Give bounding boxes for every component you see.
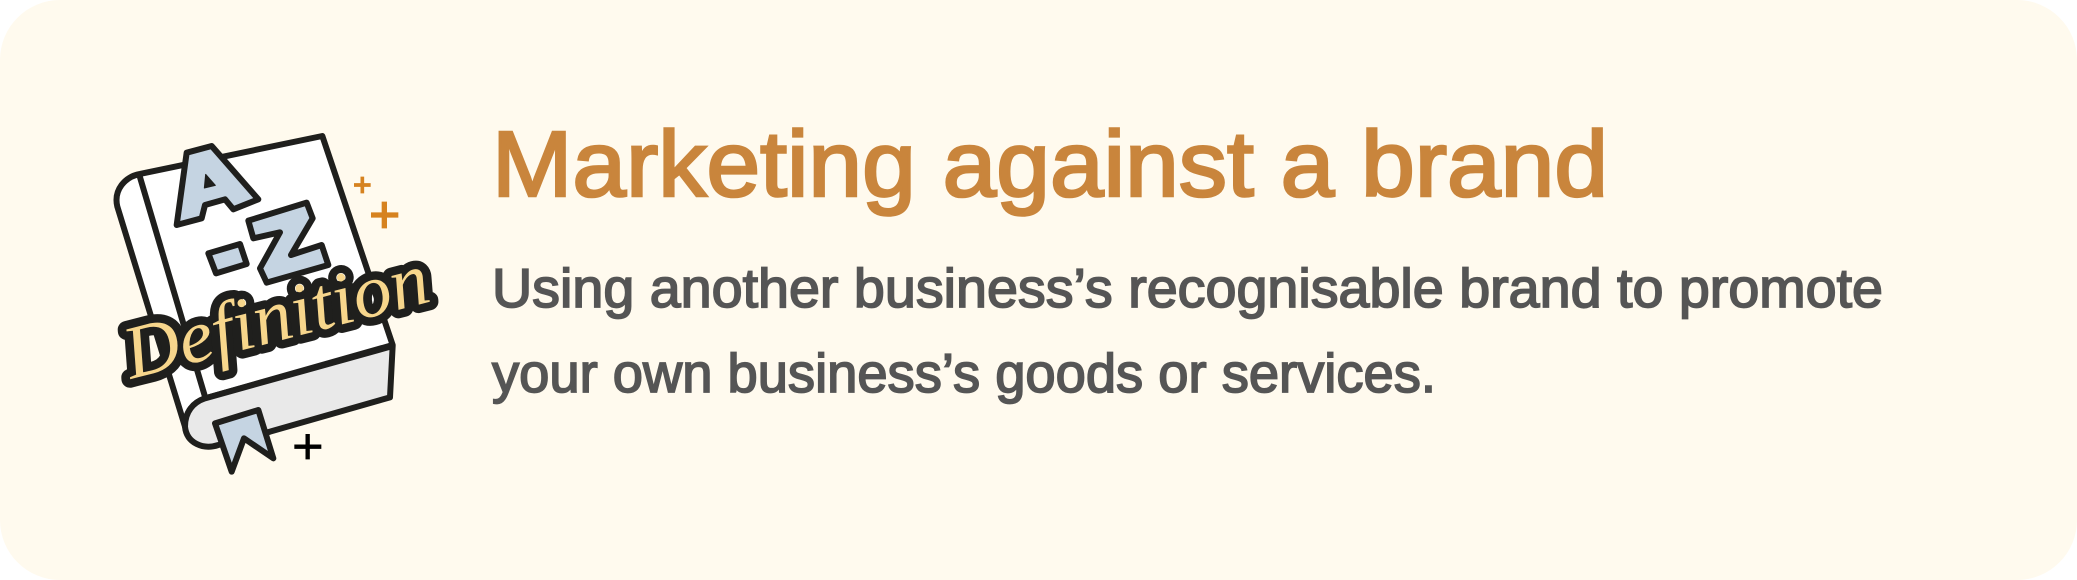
letter A counter <box>204 174 215 188</box>
letter shape A <box>177 146 258 225</box>
icon: definition book <box>117 136 398 472</box>
badge: Definition script lettering: Definition <box>113 237 437 396</box>
book cover <box>117 136 393 427</box>
black plus <box>294 434 321 459</box>
definition text <box>492 257 1883 404</box>
letter shape Z <box>248 203 328 283</box>
definition line 2: your own business’s goods or services. <box>492 342 1436 404</box>
book spine line <box>139 175 205 397</box>
bookmark ribbon <box>215 410 273 472</box>
book page block <box>185 346 393 447</box>
dash shape <box>208 244 247 273</box>
title: Marketing against a brand <box>492 112 1608 216</box>
definition line 1: Using another business’s recognisable brand to promote <box>492 257 1883 319</box>
large orange plus <box>371 202 398 228</box>
small orange plus <box>354 177 371 193</box>
